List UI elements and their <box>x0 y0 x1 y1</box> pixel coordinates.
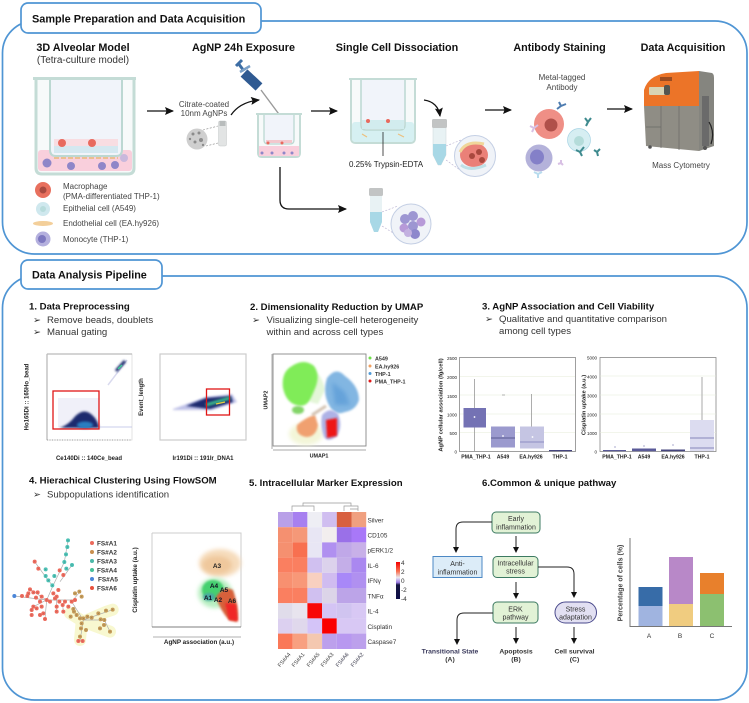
heading: sample preparation <box>21 3 261 33</box>
label: citrate-coated AgNPs: Citrate-coated <box>179 100 229 109</box>
legend: FlowSOM clusters: FS#A2 <box>97 550 117 556</box>
icon: tube with monocytes <box>369 188 431 244</box>
outcome labels: Apoptosis <box>499 648 533 656</box>
legend: heatmap colour scale: 0 <box>401 578 405 585</box>
icon: tube with cell suspension <box>432 119 496 176</box>
outcome labels: (C) <box>570 656 579 664</box>
section 5 heading: marker expression: 5. Intracellular Marker Expression <box>249 478 403 489</box>
chart: UMAP: EA.hy926 <box>375 364 399 370</box>
legend: FlowSOM clusters: FS#A6 <box>97 586 117 592</box>
section 3 text: association and viability: 3. AgNP Association and Cell Viability <box>482 302 655 312</box>
chart: AgNP cellular association box plot: 1000 <box>447 412 457 418</box>
chart: AgNP cellular association box plot: 1500 <box>447 394 457 399</box>
section 1 text: data preprocessing: ➢ <box>33 327 41 338</box>
legend: heatmap colour scale: -2 <box>401 587 407 594</box>
chart: percentage of cells stacked bars: A <box>647 633 652 640</box>
arrow: model to exposure <box>147 110 173 112</box>
section 6 heading: pathway: 6.Common & unique pathway <box>482 478 617 489</box>
chart: cisplatin uptake box plot: PMA_THP-1 <box>602 454 632 460</box>
chart: cisplatin uptake box plot: A549 <box>638 454 650 460</box>
section 3 text: association and viability: among cell types <box>499 326 571 337</box>
chart: heatmap: FS#A3 <box>320 652 336 669</box>
chart: heatmap: TNFα <box>368 594 384 600</box>
chart: UMAP: UMAP2 <box>264 391 270 409</box>
box: intracellular stress: stress <box>506 568 525 576</box>
outcome labels: Cell survival <box>554 648 595 656</box>
arrows: pathway connections <box>456 522 574 644</box>
section 3 text: association and viability: ➢ <box>485 314 493 325</box>
chart: heatmap: FS#A5 <box>306 652 322 669</box>
heading: single cell dissociation: Single Cell Dissociation <box>336 42 458 54</box>
outcome labels <box>422 648 595 664</box>
chart: event length scatter <box>139 354 246 462</box>
outcome labels: (B) <box>511 656 521 664</box>
chart: FlowSOM tree <box>12 539 114 642</box>
chart: heatmap: Cisplatin <box>368 624 392 631</box>
chart: cisplatin uptake box plot: 5000 <box>587 356 597 360</box>
chart: AgNP vs cisplatin cluster scatter: A1 <box>204 595 213 602</box>
icon: pipette <box>236 60 289 127</box>
chart: bead gating scatter: Ce140Di :: 140Ce_bead <box>56 456 122 462</box>
label: metal-tagged antibody <box>539 73 585 92</box>
heading: antibody staining: Antibody Staining <box>513 42 606 54</box>
legend: FlowSOM clusters: FS#A5 <box>98 576 118 584</box>
chart: cisplatin uptake box plot: THP-1 <box>694 454 710 460</box>
chart: heatmap: IFNγ <box>368 578 382 585</box>
chart: percentage of cells stacked bars <box>618 538 732 640</box>
label: trypsin: 0.25% Trypsin-EDTA <box>349 160 424 169</box>
section 4 text: FlowSOM clustering: ➢ <box>33 490 41 500</box>
legend: FlowSOM clusters: FS#A3 <box>97 558 117 566</box>
label: mass cytometry: Mass Cytometry <box>652 161 710 170</box>
chart: UMAP: A549 <box>375 356 388 362</box>
label: metal-tagged antibody: Metal-tagged <box>539 73 585 82</box>
section 4 text: FlowSOM clustering: Subpopulations identification <box>47 490 169 500</box>
box: early inflammation: inflammation <box>496 524 536 532</box>
chart: cisplatin uptake box plot: 2000 <box>587 412 597 418</box>
arrow: dissociation to staining <box>485 109 511 111</box>
chart: AgNP cellular association box plot: THP-1 <box>552 454 568 460</box>
legend: heatmap colour scale <box>396 560 407 603</box>
section 1 text: data preprocessing: 1. Data Preprocessing <box>29 302 130 312</box>
box: stress adaptation: Stress <box>566 606 586 614</box>
legend: FlowSOM clusters: FS#A4 <box>97 568 117 574</box>
chart: heatmap: Caspase7 <box>368 639 397 646</box>
icon: mass cytometer <box>644 71 714 151</box>
legend: cell types: Epithelial cell (A549) <box>63 204 136 213</box>
section 2 text: UMAP: within and across cell types <box>266 327 383 338</box>
chart: UMAP: UMAP1 <box>310 454 328 460</box>
legend: cell types: Macrophage <box>63 182 108 191</box>
box: anti-inflammation: inflammation <box>438 570 477 576</box>
heading: 3D alveolar model <box>36 42 130 66</box>
label: trypsin <box>349 132 424 169</box>
chart: event length scatter: Event_length <box>139 378 145 416</box>
chart: dendrogram <box>292 503 358 511</box>
box: early inflammation <box>492 512 540 533</box>
chart: AgNP cellular association box plot: 2500 <box>447 356 457 361</box>
chart: cisplatin uptake box plot: EA.hy926 <box>661 454 685 460</box>
section 3 text: association and viability: Qualitative and quantitative comparison <box>499 314 667 325</box>
section 1 text: data preprocessing <box>29 302 153 338</box>
section 2 text: UMAP: Visualizing single-cell heterogeneity <box>266 315 419 326</box>
arrow: AgNPs to well <box>231 100 259 115</box>
chart: cisplatin uptake box plot: Cisplatin uptake (a.u.) <box>582 375 588 435</box>
chart: cisplatin uptake box plot: 1000 <box>587 431 597 436</box>
arrow: well to tube <box>424 100 440 116</box>
legend: heatmap colour scale: 2 <box>401 569 405 576</box>
section 1 text: data preprocessing: ➢ <box>33 315 41 326</box>
section 2 text: UMAP: ➢ <box>252 315 260 326</box>
chart: event length scatter: Ir191Di :: 191Ir_DNA1 <box>172 456 234 462</box>
section 2 text: UMAP: 2. Dimensionality Reduction by UMAP <box>250 302 424 313</box>
illustration: tetra-culture well <box>33 77 136 174</box>
chart: heatmap: pERK1/2 <box>368 548 394 554</box>
chart: heatmap: FS#A6 <box>335 652 351 669</box>
chart: heatmap: FS#A4 <box>277 652 293 669</box>
chart: percentage of cells stacked bars: Percentage of cells (%) <box>618 545 624 621</box>
chart: AgNP cellular association box plot: EA.hy926 <box>519 454 543 460</box>
chart: AgNP cellular association box plot: PMA_THP-1 <box>461 454 491 460</box>
heading: data acquisition: Data Acquisition <box>641 42 725 54</box>
arrow: exposure down to monocyte tube <box>280 167 346 209</box>
chart: heatmap: IL-4 <box>368 608 379 616</box>
arrow: staining to acquisition <box>607 108 632 110</box>
heading: sample preparation: Sample Preparation and Data Acquisition <box>32 14 245 26</box>
legend: cell types: Endothelial cell (EA.hy926) <box>63 219 159 228</box>
box: ERK pathway <box>493 602 538 623</box>
outcome labels: (A) <box>445 656 455 664</box>
flowchart: pathway <box>422 512 596 664</box>
chart: AgNP vs cisplatin cluster scatter: A5 <box>220 587 229 594</box>
section 4 text: FlowSOM clustering: 4. Hierachical Clustering Using FlowSOM <box>29 476 217 486</box>
illustration: stained cells with antibodies <box>526 102 600 178</box>
icon: nanoparticles and vial <box>186 121 226 150</box>
chart: percentage of cells stacked bars: B <box>678 633 682 640</box>
chart: AgNP vs cisplatin cluster scatter: Cisplatin uptake (a.u.) <box>132 547 139 613</box>
box: anti-inflammation <box>433 556 482 578</box>
illustration: dissociation well <box>349 78 417 143</box>
chart: AgNP vs cisplatin cluster scatter: A6 <box>228 598 237 605</box>
chart: cisplatin uptake box plot: 3000 <box>587 394 597 398</box>
label: citrate-coated AgNPs: 10nm AgNPs <box>181 109 227 118</box>
heading: 3D alveolar model: 3D Alveolar Model <box>36 42 130 54</box>
heading: 3D alveolar model: (Tetra-culture model) <box>37 55 129 66</box>
chart: UMAP: THP-1 <box>375 372 391 378</box>
box: intracellular stress <box>493 556 538 578</box>
box: ERK pathway: pathway <box>502 614 529 622</box>
chart: heatmap <box>277 512 397 669</box>
arrow: exposure to dissociation <box>311 110 337 112</box>
section 1 text: data preprocessing: Remove beads, doublets <box>47 315 153 326</box>
panel: sample preparation and data acquisition <box>2 3 747 254</box>
legend: cell types: Monocyte (THP-1) <box>63 235 129 244</box>
chart: heatmap: CD105 <box>368 532 388 540</box>
section 2 text: UMAP <box>250 302 424 338</box>
chart: heatmap: Silver <box>368 518 384 524</box>
chart: heatmap: IL-6 <box>368 563 379 570</box>
box: stress adaptation: adaptation <box>559 614 592 622</box>
chart: AgNP cellular association box plot: AgNP cellular association (fg/cell) <box>438 358 444 452</box>
chart: AgNP vs cisplatin cluster scatter <box>132 533 241 646</box>
outcome labels: Transitional State <box>422 648 479 656</box>
chart: percentage of cells stacked bars: C <box>710 633 715 640</box>
section 1 text: data preprocessing: Manual gating <box>47 327 107 338</box>
illustration: exposure well <box>256 113 302 157</box>
chart: cisplatin uptake box plot: 0 <box>594 450 597 454</box>
chart: AgNP cellular association box plot: A549 <box>497 454 509 460</box>
chart: cisplatin uptake box plot <box>582 356 716 460</box>
legend: heatmap colour scale: -4 <box>401 596 407 603</box>
box: early inflammation: Early <box>508 516 524 523</box>
chart: bead gating scatter <box>24 354 132 462</box>
chart: AgNP vs cisplatin cluster scatter: A2 <box>214 597 223 604</box>
chart: AgNP cellular association box plot: 500 <box>449 431 457 436</box>
box: stress adaptation <box>555 602 596 623</box>
legend: FlowSOM clusters: FS#A1 <box>97 540 117 548</box>
box: ERK pathway: ERK <box>508 606 523 614</box>
heading: AgNP exposure: AgNP 24h Exposure <box>192 42 295 54</box>
label: citrate-coated AgNPs <box>179 100 229 118</box>
chart: heatmap: FS#A1 <box>291 652 307 669</box>
chart: AgNP vs cisplatin cluster scatter: A3 <box>213 563 222 570</box>
heading: data analysis pipeline: Data Analysis Pipeline <box>32 270 147 282</box>
chart: AgNP vs cisplatin cluster scatter: A4 <box>210 583 219 590</box>
legend: cell types <box>33 182 160 246</box>
chart: bead gating scatter: Ho165Di :: 165Ho_bead <box>24 363 30 430</box>
chart: heatmap: FS#A2 <box>350 652 366 669</box>
section 3 text: association and viability <box>482 302 667 337</box>
box: anti-inflammation: Anti- <box>450 561 465 568</box>
chart: UMAP <box>264 354 406 460</box>
legend: cell types: (PMA-differentiated THP-1) <box>63 192 160 201</box>
section 4 text: FlowSOM clustering <box>29 476 217 500</box>
legend: heatmap colour scale: 4 <box>401 560 405 567</box>
chart: AgNP cellular association box plot: 2000 <box>447 375 457 380</box>
chart: UMAP: PMA_THP-1 <box>375 380 406 386</box>
chart: cisplatin uptake box plot: 4000 <box>587 374 597 380</box>
label: metal-tagged antibody: Antibody <box>546 83 578 92</box>
chart: AgNP vs cisplatin cluster scatter: AgNP association (a.u.) <box>164 639 234 646</box>
box: intracellular stress: Intracellular <box>497 560 534 568</box>
chart: AgNP cellular association box plot: 0 <box>454 450 457 454</box>
panel: data analysis pipeline <box>2 260 747 700</box>
heading: data analysis pipeline <box>21 260 162 289</box>
legend: FlowSOM clusters <box>90 540 118 592</box>
chart: AgNP cellular association box plot <box>438 356 576 460</box>
